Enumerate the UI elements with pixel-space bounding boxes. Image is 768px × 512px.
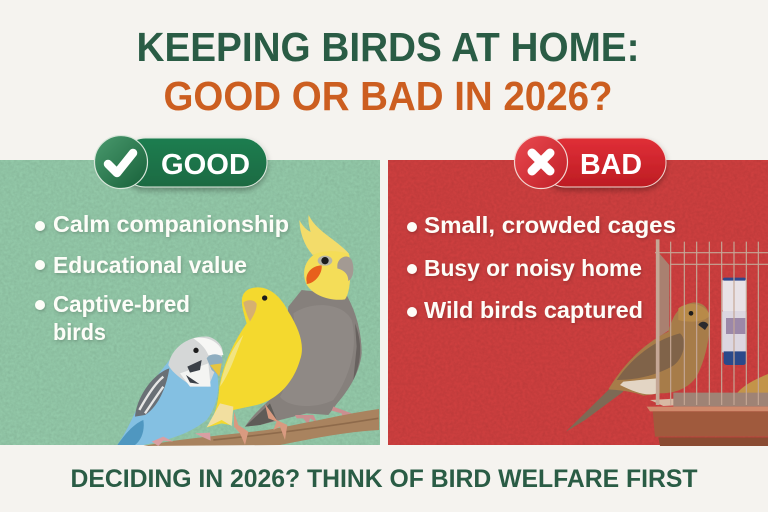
second bird in cage xyxy=(733,374,768,405)
list: good points: Captive-bred xyxy=(53,291,190,317)
list: good points: Educational value xyxy=(53,252,247,278)
cage bars xyxy=(655,239,768,405)
list: good points: birds xyxy=(53,319,106,345)
badge: good xyxy=(94,136,267,188)
icon: cross xyxy=(514,136,568,188)
illustration: three birds on a branch xyxy=(117,215,379,446)
panel: good xyxy=(0,160,380,446)
footer message: DECIDING IN 2026? THINK OF BIRD WELFARE FIRST xyxy=(70,466,698,493)
list: bad points xyxy=(407,212,676,323)
bird: yellow parakeet xyxy=(207,287,302,445)
badge: good: GOOD xyxy=(161,149,250,181)
bird: cockatiel xyxy=(245,215,362,430)
list: good points xyxy=(35,211,289,345)
badge: bad: BAD xyxy=(580,149,642,181)
water bottle xyxy=(722,278,747,365)
bird: blue budgerigar xyxy=(117,337,223,446)
badge: bad xyxy=(514,136,666,188)
list: bad points: Small, crowded cages xyxy=(424,212,676,238)
list: bad points: Busy or noisy home xyxy=(424,255,642,281)
title: GOOD OR BAD IN 2026? xyxy=(164,73,612,119)
panel: bad xyxy=(388,160,768,446)
title: KEEPING BIRDS AT HOME: xyxy=(136,24,640,70)
list: good points: Calm companionship xyxy=(53,211,289,237)
cage tray xyxy=(647,393,768,446)
illustration: caged bird xyxy=(566,239,768,446)
title xyxy=(136,24,640,119)
icon: check mark xyxy=(94,136,148,188)
cage back panel xyxy=(659,253,669,337)
bird: brown finch xyxy=(566,302,710,432)
list: bad points: Wild birds captured xyxy=(424,297,643,323)
branch xyxy=(143,409,379,446)
